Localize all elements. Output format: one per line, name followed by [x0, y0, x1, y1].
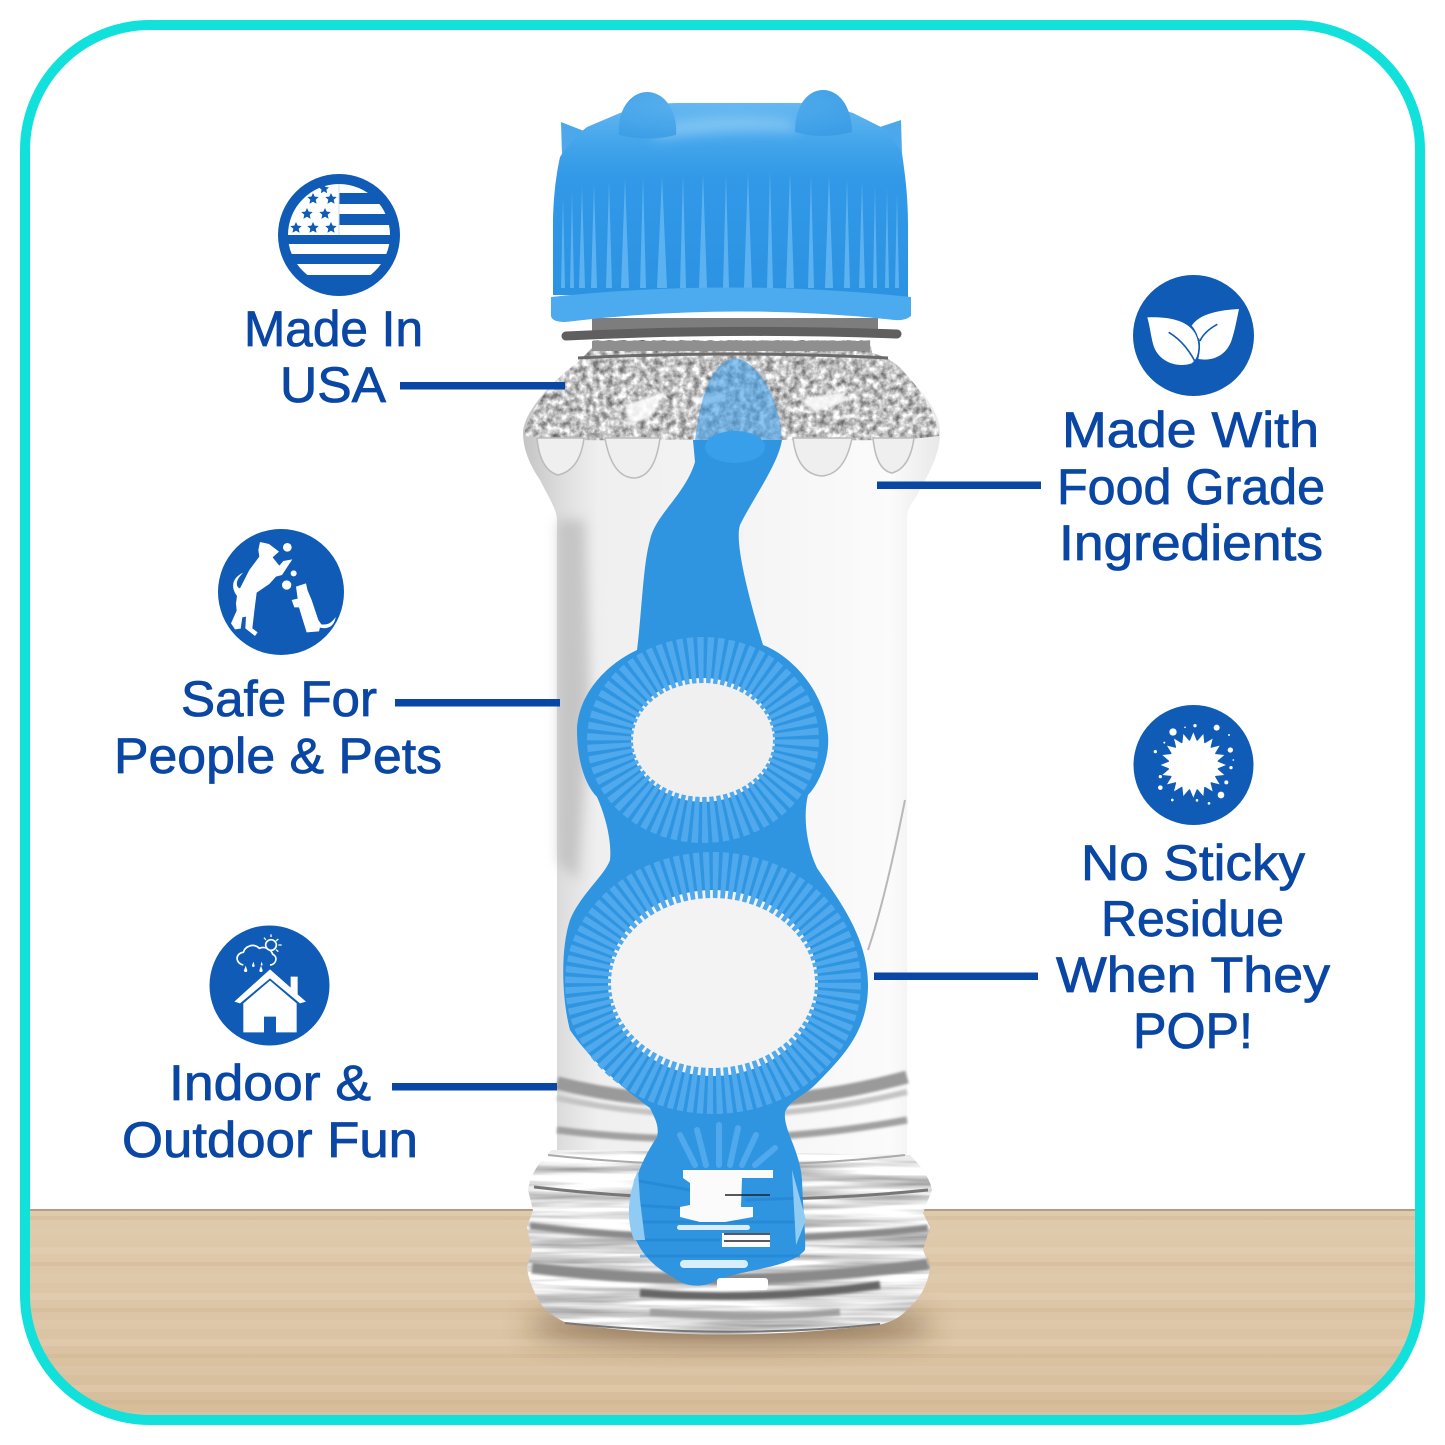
connector line — [392, 1083, 557, 1090]
connector line — [395, 699, 560, 706]
cap knobs — [619, 90, 852, 138]
foam bubbles — [524, 340, 939, 440]
cap dome — [553, 103, 908, 297]
tab eyelet — [705, 431, 765, 463]
icon: house with weather — [210, 926, 330, 1046]
cap highlight — [650, 116, 800, 140]
callout: Made With Food Grade Ingredients — [877, 275, 1325, 571]
callout: Indoor & Outdoor Fun: Outdoor Fun — [122, 1112, 418, 1168]
callout: Indoor & Outdoor Fun — [122, 926, 557, 1168]
callout: Made In USA — [244, 174, 565, 413]
label text: Safe For — [181, 671, 377, 727]
small ring hole — [631, 678, 775, 802]
neck threads — [566, 318, 897, 358]
lower bristles — [680, 1125, 775, 1165]
background: wood table — [25, 1209, 1420, 1425]
product: bubble bottle — [523, 90, 940, 1335]
bottle cap — [551, 90, 911, 322]
large ring hole — [608, 890, 818, 1076]
refracted wand in base — [629, 1170, 806, 1290]
callout: Made With Food Grade Ingredients: Food Grade — [1057, 459, 1325, 515]
callout: No Sticky Residue When They POP!: Residue — [1101, 891, 1284, 947]
callout: Made With Food Grade Ingredients: Ingredients — [1059, 515, 1323, 571]
cap lip — [551, 288, 911, 322]
wand silhouette — [563, 440, 868, 1286]
callout: No Sticky Residue When They POP! — [874, 705, 1330, 1059]
callout: Made In USA: USA — [280, 357, 387, 413]
large ring bristles — [588, 875, 838, 1091]
callout: No Sticky Residue When They POP!: When They — [1056, 947, 1330, 1003]
icon: leaves — [1133, 275, 1254, 396]
cap ribs — [561, 170, 899, 288]
callout: Safe For People & Pets: People & Pets — [114, 728, 442, 784]
connector line — [874, 972, 1038, 980]
label text: Made In — [244, 301, 423, 357]
cap ears — [561, 120, 902, 155]
flag stars — [290, 184, 337, 233]
label text: Made With — [1062, 402, 1319, 458]
foam glints — [625, 392, 850, 424]
bottle base — [527, 1150, 932, 1335]
connector line — [400, 382, 565, 390]
icon: bubble pop splash — [1134, 705, 1254, 825]
small ring bristles — [610, 660, 796, 820]
icon: American flag — [278, 174, 400, 296]
bottle base threads — [530, 1155, 928, 1332]
glass highlights and reflections — [557, 520, 907, 1139]
icon: dog and cat with bubbles — [218, 529, 344, 655]
callout: Safe For People & Pets — [114, 529, 560, 784]
bubble wand — [563, 358, 868, 1290]
label text: No Sticky — [1081, 835, 1305, 891]
label text: Indoor & — [169, 1055, 371, 1111]
connector line — [877, 482, 1041, 489]
scallop bumps — [537, 438, 914, 478]
shadow under bottle — [525, 1311, 935, 1341]
wand tab in foam — [695, 358, 782, 440]
callout: No Sticky Residue When They POP!: POP! — [1133, 1003, 1253, 1059]
bottle glass — [523, 340, 940, 1156]
